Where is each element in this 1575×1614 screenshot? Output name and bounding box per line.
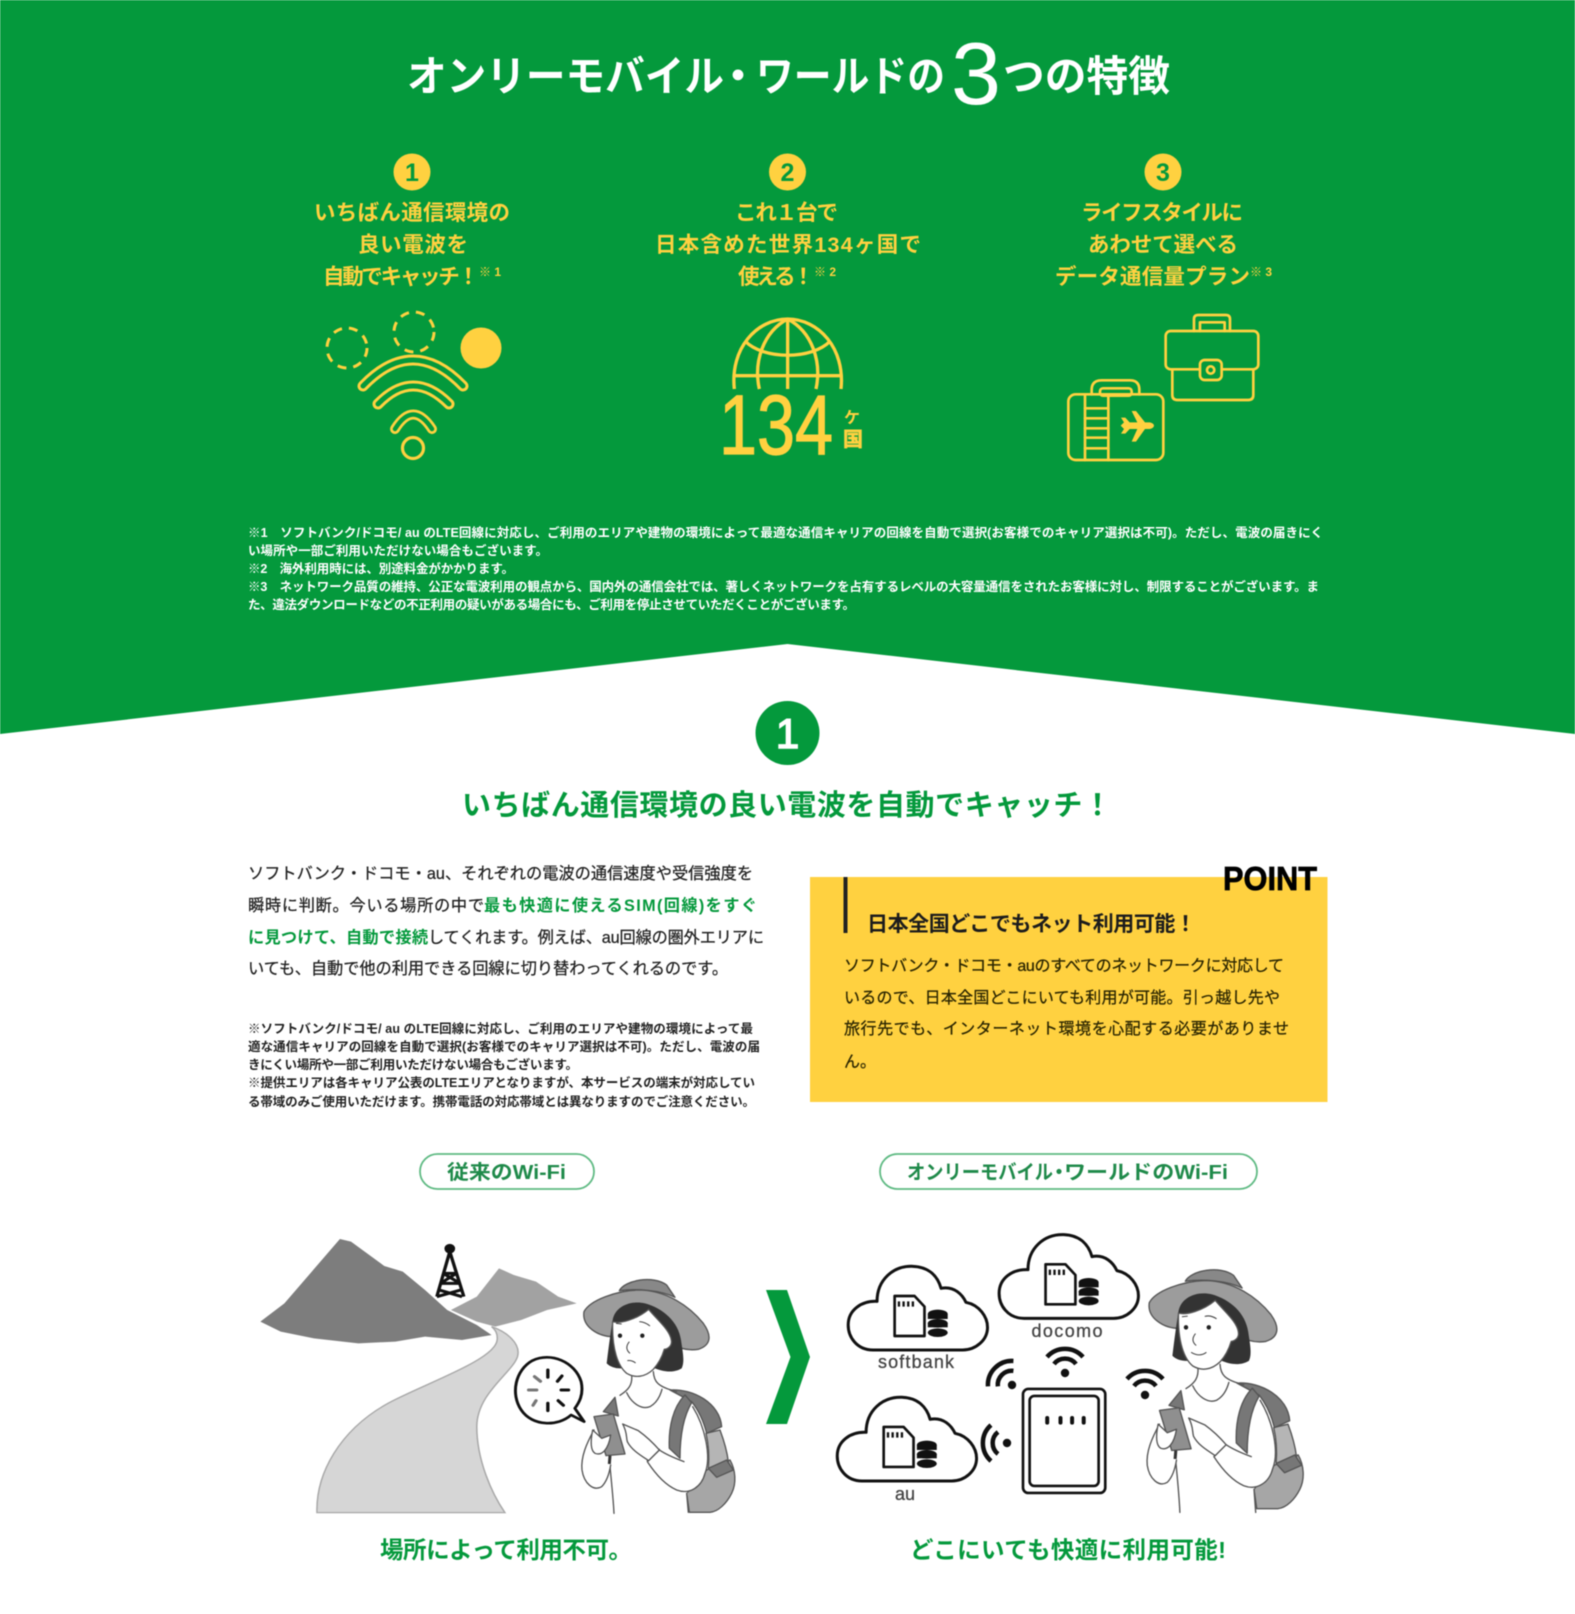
face [613,1309,672,1376]
carrier labels: au [895,1484,915,1504]
hat crown [619,1280,675,1297]
text block: explanation: に見つけて、自動で接続 [248,928,428,947]
text block: notes: ※ソフトバンク/ドコモ/ au のLTE回線に対応し、ご利用のエリアや建物の環境によって最 [248,1021,753,1036]
cloud: softbank [848,1266,988,1350]
title: オンリーモバイル [407,53,724,100]
icon: travel suitcase [1068,380,1163,460]
icon: 134 countries label: 134 [719,378,833,472]
hat brim [1149,1281,1277,1342]
arms [1147,1424,1176,1484]
footnotes: ※1 ソフトバンク/ドコモ/ au のLTE回線に対応し、ご利用のエリアや建物の環境によって最適な通信キャリアの回線を自動で選択(お客様でのキャリア選択は不可)。ただし、電波の届きにく [248,525,1323,540]
text block: notes: ※提供エリアは各キャリア公表のLTEエリアとなりますが、本サービスの端末が対応してい [248,1075,755,1090]
panel: feature 2 [655,154,921,472]
neck and collar [1186,1364,1244,1389]
heading: feature 3: ※3 [1250,265,1272,279]
heading: point: 日本全国どこでもネット利用可能！ [867,913,1196,936]
heading: feature 3: あわせて選べる [1088,233,1238,257]
icon: 134 countries label: 国 [843,429,863,451]
tower [437,1245,464,1297]
icon: 134 countries label: ケ [844,409,860,427]
front mountain [260,1239,492,1343]
badge: number 2 [769,154,806,190]
icon: globe [734,319,841,389]
badge: number 3 [1144,154,1182,190]
caption: only mobile world wifi: どこにいても快適に利用可能! [910,1537,1226,1563]
cloud: au [837,1397,977,1481]
heading: feature 1 [314,201,510,289]
neck and collar [620,1372,677,1395]
hat brim [584,1290,709,1350]
brows, nose and mouth [616,1322,650,1363]
text block: point body: 旅行先でも、インターネット環境を心配する必要がありませ [844,1020,1289,1038]
badge: section number 1 [756,701,820,765]
heading: feature 2: 日本含めた世界134ヶ国で [655,233,921,257]
phone [1159,1408,1191,1450]
heading: feature 1: 良い電波を [358,233,468,257]
arms [582,1430,611,1488]
icon: wifi signals [982,1349,1163,1461]
icon: airplane [1121,411,1154,442]
heading: feature 1: ※1 [479,265,501,279]
heading: feature 1: いちばん通信環境の [314,201,510,225]
heading: feature 2 [655,201,921,289]
footnotes: い場所や一部ご利用いただけない場合もございます。 [248,543,548,558]
title [407,24,1170,123]
pill: only mobile world wifi [880,1154,1257,1189]
holding hand [1157,1424,1176,1449]
phone [594,1414,625,1456]
heading: feature 3 [1055,201,1272,289]
pill: only mobile world wifi: ワールドのWi-Fi [1064,1162,1228,1184]
illustration: happy woman [1147,1270,1303,1512]
badge: section number 1: 1 [776,710,799,757]
pill: conventional wifi: 従来のWi-Fi [447,1161,566,1184]
footnotes: ※2 海外利用時には、別途料金がかかります。 [248,561,514,576]
text block: explanation: いても、自動で他の利用できる回線に切り替わってくれるのです。 [248,960,728,978]
text block: point body: ソフトバンク・ドコモ・auのすべてのネットワークに対応して [844,957,1284,975]
text block: explanation: 最も快適に使えるSIM(回線)をすぐ [484,896,757,915]
eyes [618,1333,622,1338]
text block: point body: いるので、日本全国どこにいても利用が可能。引っ越し先や [844,989,1280,1007]
cloud: docomo [999,1235,1138,1318]
caption: conventional wifi: 場所によって利用不可。 [380,1537,632,1563]
back mountain [451,1268,577,1327]
title: 3 [951,24,1001,123]
heading: feature 2: 使える！ [738,265,814,289]
icon: wifi router [1023,1389,1105,1493]
hat crown [1185,1270,1242,1288]
heading: feature 3: ライフスタイルに [1081,201,1243,225]
label: POINT: POINT [1223,860,1317,897]
icon: loading speech bubble [515,1357,584,1423]
panel: green features header background [0,0,1575,734]
brows, nose and smile [1182,1316,1217,1355]
heading: feature 1: 自動でキャッチ！ [323,265,479,289]
arrow: chevron [766,1290,810,1424]
hair [1172,1293,1251,1364]
road [317,1327,518,1513]
body [605,1390,693,1513]
illustration: confused woman [582,1280,735,1513]
title: ワールドの [756,53,945,100]
pointing hand [1189,1418,1226,1456]
carrier labels: docomo [1032,1321,1102,1341]
badge: number 3: 3 [1156,159,1170,187]
badge: number 1: 1 [405,159,419,187]
illustration: three carrier clouds [837,1235,1138,1481]
hair [607,1302,683,1371]
text block: point body [844,957,1289,1071]
text block: explanation: ソフトバンク・ドコモ・au、それぞれの電波の通信速度や受信強度を [248,865,753,883]
text block: point body: ん。 [844,1054,876,1071]
text block: explanation: 瞬時に判断。今いる場所の中で [248,897,484,915]
accent bar [844,877,848,933]
text block: explanation: してくれます。例えば、au回線の圏外エリアに [428,929,764,947]
panel: point callout [810,860,1328,1102]
text block: notes: きにくい場所や一部ご利用いただけない場合もございます。 [248,1057,578,1072]
heading: feature 2: これ１台で [735,201,838,225]
badge: number 1 [394,154,430,190]
badge: number 2: 2 [781,159,794,187]
text block: explanation [248,865,764,978]
eyes [1184,1325,1188,1330]
body [1171,1383,1261,1512]
footnotes [248,525,1323,612]
backpack [687,1460,735,1512]
pill: only mobile world wifi: ・ [1049,1162,1069,1184]
pointing hand [623,1424,659,1461]
illustration: mountains, tower and road [260,1239,577,1513]
footnotes: ※3 ネットワーク品質の維持、公正な電波利用の観点から、国内外の通信会社では、著しくネットワークを占有するレベルの大容量通信をされたお客様に対し、制限することがございます。ま [248,579,1319,594]
title: ・ [717,53,759,100]
icon: wifi with sim circles [327,312,502,458]
carrier labels [878,1321,1102,1504]
section heading: いちばん通信環境の良い電波を自動でキャッチ！ [462,789,1112,822]
backpack [1254,1455,1303,1509]
pill: only mobile world wifi: オンリーモバイル [907,1161,1053,1184]
text block: notes: 適な通信キャリアの回線を自動で選択(お客様でのキャリア選択は不可)。ただし、電波の届 [248,1039,760,1054]
face [1178,1300,1239,1369]
pill: conventional wifi [420,1154,594,1189]
heading: feature 2: ※2 [814,265,836,279]
panel: feature 3 [1055,154,1272,460]
text block: notes [248,1021,760,1109]
icon: briefcase [1166,315,1258,400]
text block: notes: る帯域のみご使用いただけます。携帯電話の対応帯域とは異なりますのでご注意ください。 [248,1094,755,1109]
panel: feature 1 [314,154,510,458]
holding hand [591,1430,611,1454]
footnotes: た、違法ダウンロードなどの不正利用の疑いがある場合にも、ご利用を停止させていただくことがございます。 [248,597,855,612]
carrier labels: softbank [878,1352,955,1372]
heading: feature 3: データ通信量プラン [1055,264,1250,289]
title: つの特徴 [1003,53,1170,100]
